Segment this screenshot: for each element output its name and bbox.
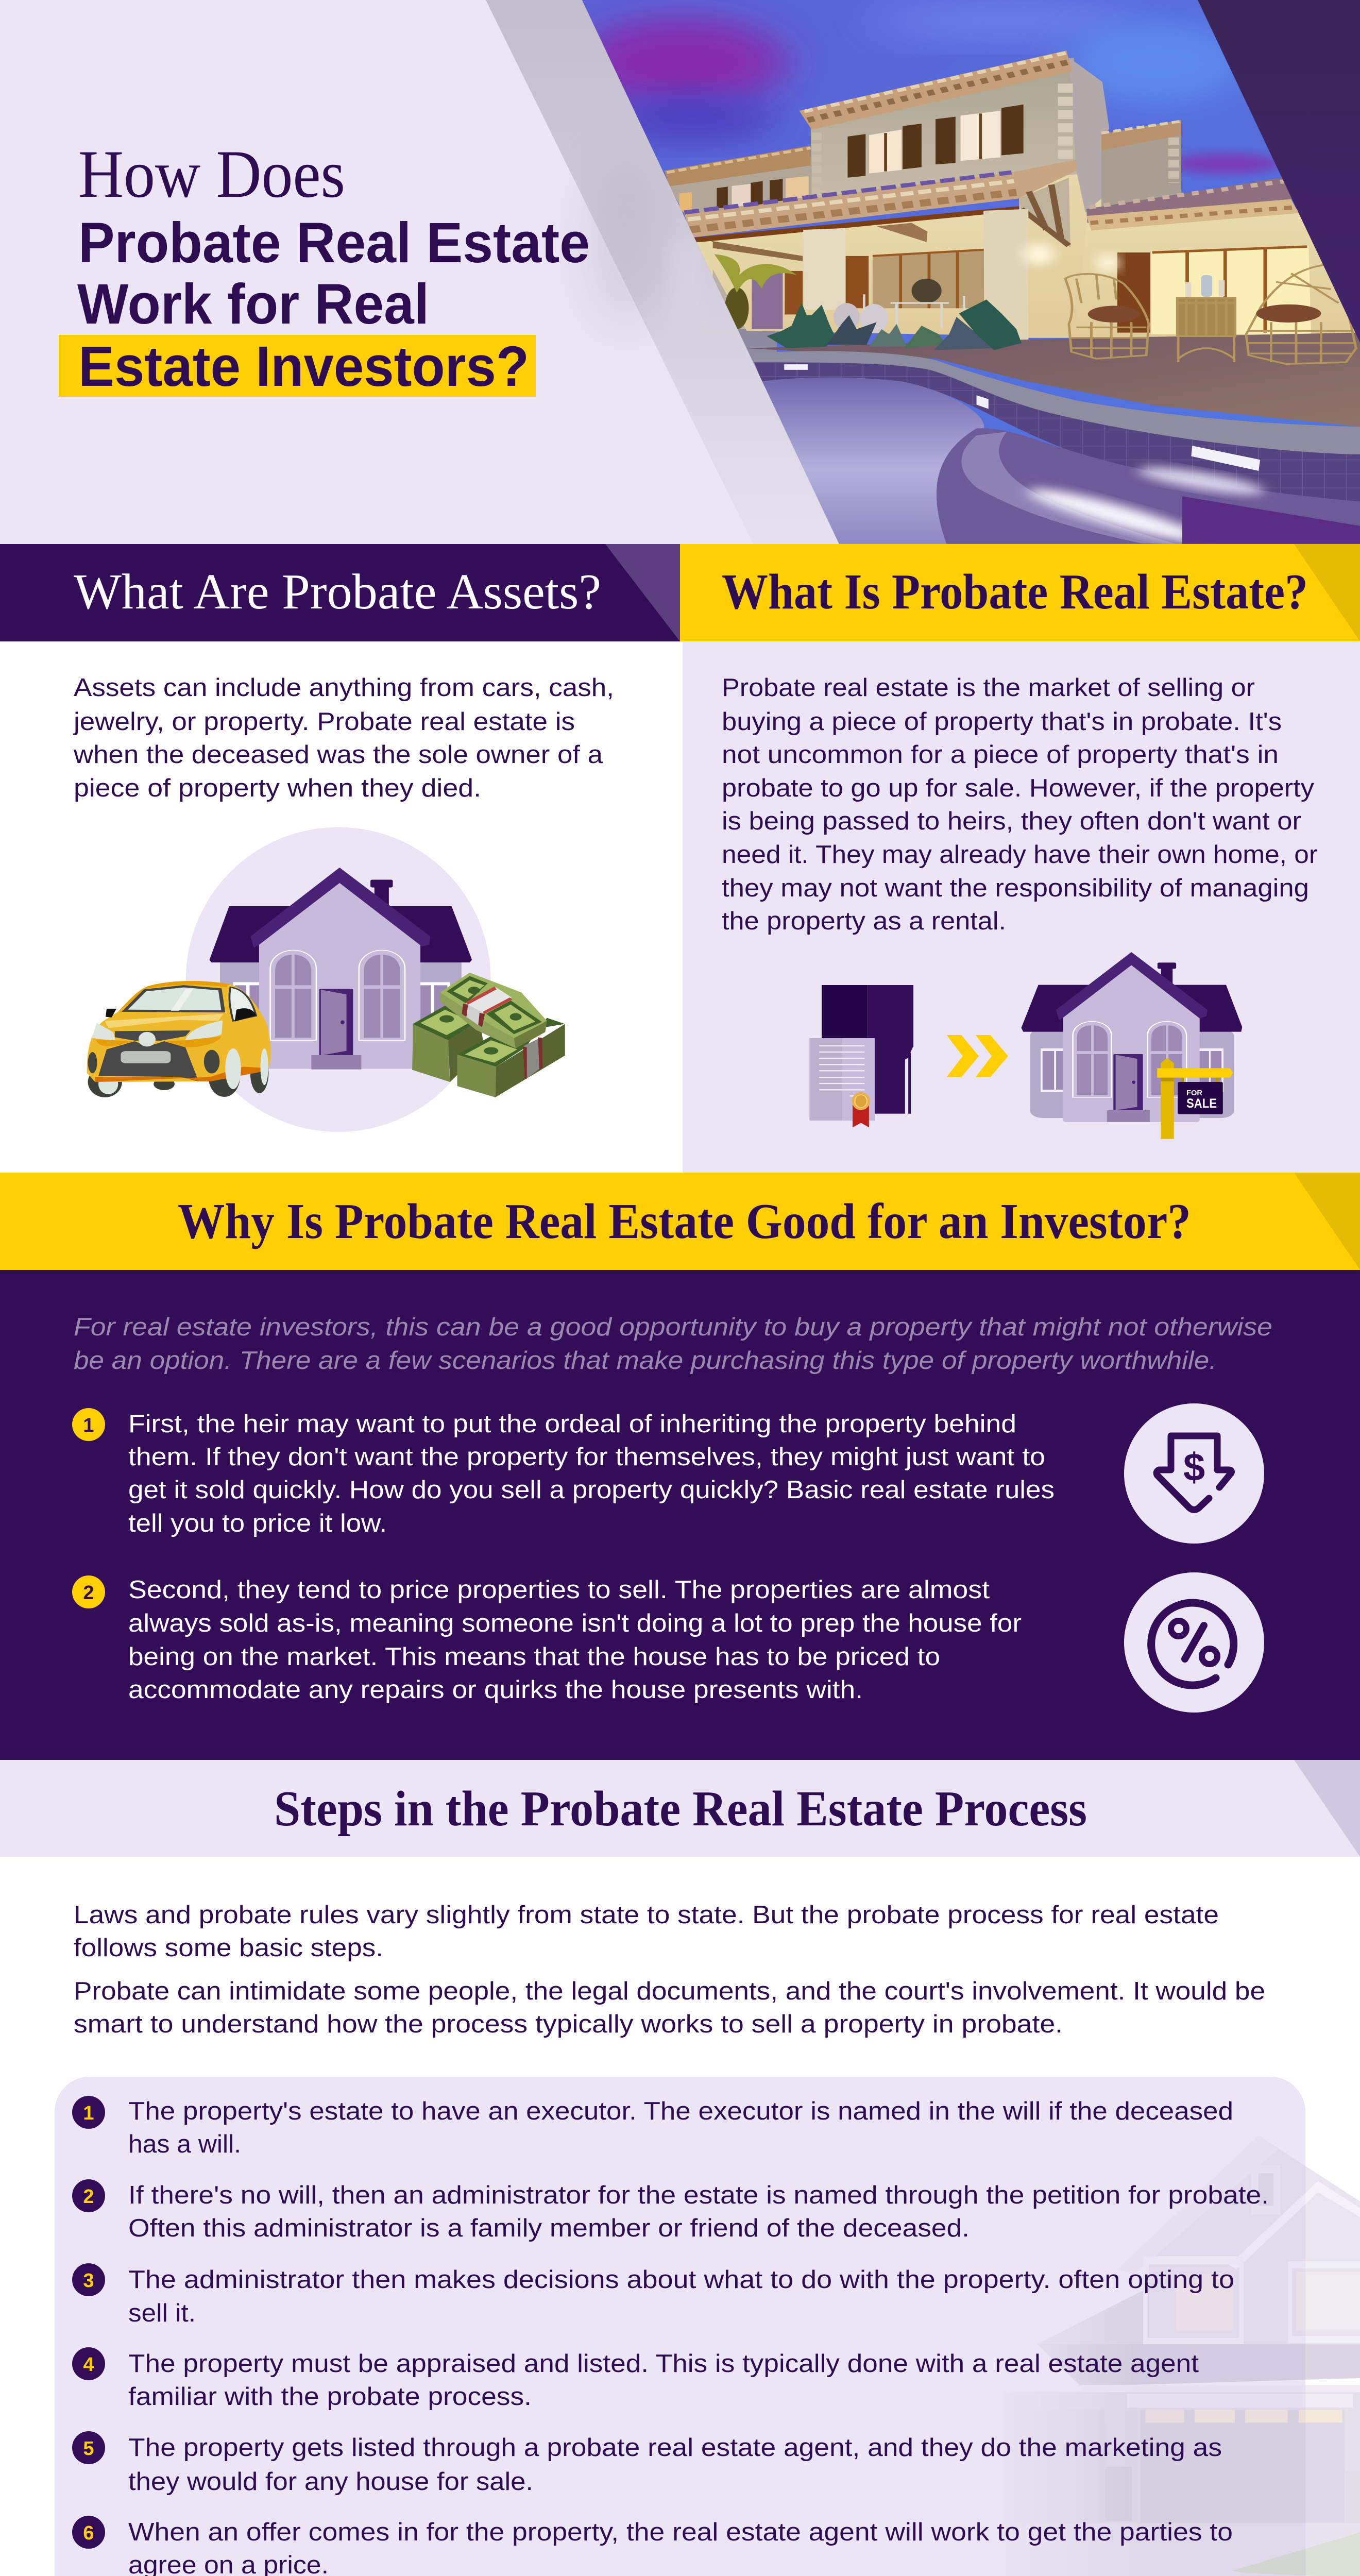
photo: villa with pool at dusk	[577, 0, 1360, 550]
text block: probate real estate: is being passed to heirs, they often don't want or	[722, 807, 1301, 835]
lamps	[1024, 244, 1119, 272]
panel: what are probate assets	[0, 544, 683, 1173]
item 1: 1	[83, 1415, 94, 1436]
text block: assets	[73, 674, 614, 802]
item 2	[72, 1575, 1022, 1704]
for sale sign text	[1186, 1089, 1217, 1111]
right purple band	[1198, 0, 1360, 343]
pool tile band	[754, 362, 1360, 501]
step 2	[72, 2179, 1269, 2242]
text block: steps intro: follows some basic steps.	[74, 1934, 383, 1962]
step 6	[72, 2516, 1233, 2576]
icon: house with sign	[1021, 952, 1242, 1139]
corner quoins	[1058, 83, 1073, 159]
icon: money stacks	[412, 973, 565, 1097]
text block: assets: when the deceased was the sole owner of a	[73, 741, 603, 769]
illustration: document to house for sale	[809, 952, 1242, 1139]
step 5	[72, 2431, 1222, 2496]
step 3: The administrator then makes decisions about what to do with the property. often opting to	[128, 2266, 1234, 2294]
ground	[979, 2523, 1360, 2576]
title highlight	[59, 335, 536, 397]
step 2: If there's no will, then an administrator for the estate is named through the petition for probate.	[128, 2181, 1269, 2209]
heading bar: steps	[0, 1760, 1360, 1857]
step 2: Often this administrator is a family member or friend of the deceased.	[128, 2214, 970, 2242]
heading bar: steps: Steps in the Probate Real Estate Process	[274, 1781, 1087, 1837]
step 2: 2	[83, 2186, 94, 2208]
text block: probate real estate: the property as a rental.	[722, 907, 1006, 935]
item 1	[72, 1408, 1055, 1537]
icon: price down arrow	[1124, 1403, 1264, 1544]
title: Work for Real	[77, 273, 429, 336]
pool water	[727, 378, 984, 544]
text block: probate real estate	[722, 674, 1318, 935]
step 5: 5	[83, 2438, 94, 2460]
step 4	[72, 2347, 1199, 2411]
panel: hero	[0, 0, 1360, 550]
panel: why probate is good for an investor	[0, 1173, 1360, 1760]
step 1	[72, 2096, 1233, 2158]
icon: car	[87, 981, 270, 1097]
text block: investor intro	[74, 1313, 1272, 1375]
heading bar: assets: What Are Probate Assets?	[74, 564, 601, 620]
translucent photo band	[486, 0, 840, 544]
step 1: The property's estate to have an executor. The executor is named in the will if the deceased	[128, 2097, 1233, 2125]
item 2: 2	[83, 1582, 94, 1604]
title: How Does	[78, 136, 345, 212]
wicker chairs and table	[1065, 265, 1356, 364]
heading bar: probate real estate: What Is Probate Real Estate?	[722, 564, 1308, 620]
text block: assets: piece of property when they died.	[74, 774, 481, 802]
icon: house	[210, 868, 472, 1070]
title: Estate Investors?	[78, 335, 529, 398]
item 2: being on the market. This means that the house has to be priced to	[128, 1643, 940, 1671]
heading bar: why	[0, 1173, 1360, 1270]
icon: price down arrow: $	[1183, 1446, 1205, 1489]
base structure and terrace	[695, 136, 1101, 412]
steps card	[55, 2077, 1305, 2576]
item 1: tell you to price it low.	[128, 1510, 387, 1537]
step 3: 3	[83, 2270, 94, 2292]
pool lights and purple overlay	[784, 364, 1360, 550]
text block: steps intro: Probate can intimidate some people, the legal documents, and the court's involvement. It would be	[74, 1977, 1265, 2005]
pool stone edge	[752, 351, 1360, 454]
plants and vases	[767, 294, 1022, 350]
item 2: always sold as-is, meaning someone isn't doing a lot to prep the house for	[128, 1609, 1022, 1637]
text block: steps intro: smart to understand how the process typically works to sell a property in probate.	[74, 2010, 1063, 2038]
title	[59, 136, 590, 398]
heading bar: why: Why Is Probate Real Estate Good for an Investor?	[178, 1194, 1191, 1249]
porch	[684, 160, 1076, 347]
text block: steps intro: Laws and probate rules vary slightly from state to state. But the probate process for real estate	[74, 1901, 1219, 1929]
text block: probate real estate: need it. They may already have their own home, or	[722, 841, 1318, 869]
step 1: 1	[83, 2103, 94, 2124]
text block: assets: Assets can include anything from cars, cash,	[74, 674, 614, 702]
patio	[747, 333, 1360, 427]
left wing	[665, 146, 812, 214]
panel: steps in the process	[0, 1760, 1360, 2576]
heading bar: probate real estate	[680, 544, 1360, 641]
house body	[1037, 2287, 1149, 2344]
step 4: 4	[83, 2354, 94, 2376]
text block: probate real estate: buying a piece of property that's in probate. It's	[722, 708, 1282, 736]
text block: investor intro: For real estate investors, this can be a good opportunity to buy a property that might not otherwise	[74, 1313, 1272, 1341]
step 6: When an offer comes in for the property, the real estate agent will work to get the parties to	[128, 2518, 1233, 2546]
item 1: get it sold quickly. How do you sell a property quickly? Basic real estate rules	[128, 1476, 1055, 1504]
item 2: accommodate any repairs or quirks the house presents with.	[128, 1676, 863, 1704]
step 6: 6	[83, 2522, 94, 2544]
lower roof	[1037, 2344, 1360, 2386]
step 5: The property gets listed through a probate real estate agent, and they do the marketing as	[128, 2434, 1222, 2462]
panel: what is probate real estate	[680, 544, 1360, 1173]
background house photo	[979, 2136, 1360, 2576]
right wing	[1076, 120, 1360, 337]
text block: probate real estate: probate to go up for sale. However, if the property	[722, 774, 1315, 802]
for sale sign text: FOR	[1186, 1089, 1202, 1097]
text block: investor intro: be an option. There are a few scenarios that make purchasing this type of property worthwhile.	[74, 1347, 1217, 1375]
item 1: First, the heir may want to put the ordeal of inheriting the property behind	[128, 1410, 1016, 1438]
heading bar: assets	[0, 544, 680, 641]
text block: steps intro	[74, 1901, 1265, 2038]
step 3: sell it.	[128, 2299, 196, 2327]
step 4: The property must be appraised and listed. This is typically done with a real estate agent	[128, 2350, 1199, 2378]
illustration: house, car and money	[87, 827, 565, 1132]
house upper block	[799, 50, 1109, 212]
arrow: chevrons	[947, 1035, 1008, 1077]
step 3	[72, 2263, 1234, 2327]
title: Probate Real Estate	[78, 211, 590, 275]
chair cushions and bar items	[1088, 275, 1321, 323]
step 5: they would for any house for sale.	[128, 2468, 533, 2496]
for sale sign text: SALE	[1186, 1096, 1217, 1111]
upper windows	[847, 105, 1024, 178]
icon: percent	[1124, 1572, 1264, 1713]
icon: legal document	[809, 985, 913, 1127]
pool steps	[937, 428, 1360, 544]
text block: assets: jewelry, or property. Probate real estate is	[73, 708, 575, 736]
item 2: Second, they tend to price properties to sell. The properties are almost	[128, 1576, 990, 1604]
text block: probate real estate: they may not want the responsibility of managing	[722, 874, 1309, 902]
palm	[715, 254, 797, 329]
garage	[1003, 2392, 1360, 2523]
item 1: them. If they don't want the property for themselves, they might just want to	[128, 1443, 1045, 1471]
step 4: familiar with the probate process.	[128, 2383, 532, 2411]
step 1: has a will.	[128, 2130, 241, 2158]
text block: probate real estate: not uncommon for a piece of property that's in	[722, 741, 1279, 769]
text block: probate real estate: Probate real estate is the market of selling or	[722, 674, 1255, 702]
